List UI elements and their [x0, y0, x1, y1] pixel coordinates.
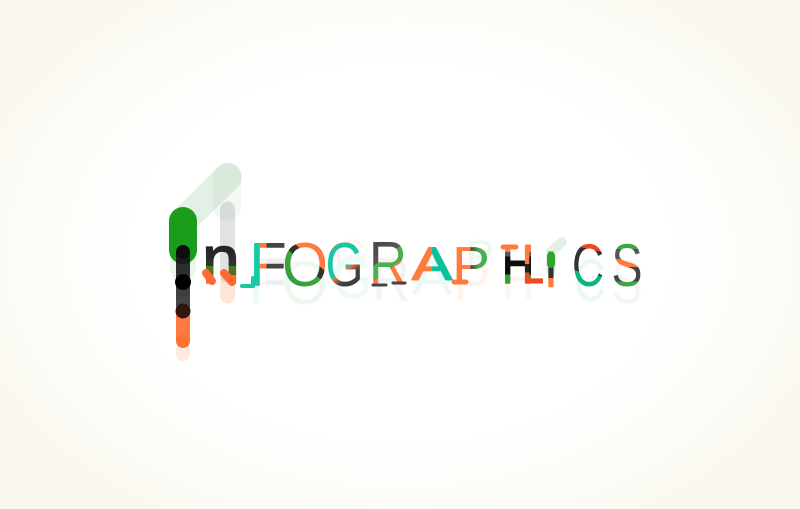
- letter P: P: [452, 237, 490, 295]
- faded reflection of the word: A: [412, 248, 452, 306]
- title word: [162, 212, 642, 380]
- faded reflection of the word: G: [332, 244, 372, 311]
- letter n: n: [202, 222, 240, 298]
- letter S: S: [612, 232, 642, 299]
- letter F: F: [249, 231, 287, 300]
- letter O: O: [282, 231, 328, 300]
- letter L: L: [522, 233, 544, 295]
- faded reflection of the word: H: [502, 250, 534, 310]
- faded reflection of the word: P: [453, 250, 491, 313]
- letter I: big initial: I: [162, 212, 204, 380]
- faded reflection of the word: S: [612, 249, 642, 316]
- letter G: G: [326, 231, 364, 300]
- faded reflection of the word: O: [282, 249, 328, 318]
- ghost stroke behind letter I: [551, 242, 562, 270]
- letter I: I: [544, 241, 558, 298]
- faded reflection of the word: [248, 231, 642, 318]
- letter C: C: [572, 232, 604, 299]
- big green capsule: [169, 207, 197, 264]
- letter A: A: [412, 238, 452, 290]
- faded reflection of the word: C: [574, 247, 606, 314]
- letter R: R: [369, 230, 407, 299]
- ghost shapes: big letter shadow: [183, 177, 228, 354]
- faded reflection of the word: G: [334, 231, 368, 280]
- faded reflection of the word: F: [248, 244, 288, 317]
- faded reflection of the word: R: [372, 246, 410, 315]
- faded reflection of the word: P: [465, 231, 494, 280]
- letter H: H: [502, 233, 534, 295]
